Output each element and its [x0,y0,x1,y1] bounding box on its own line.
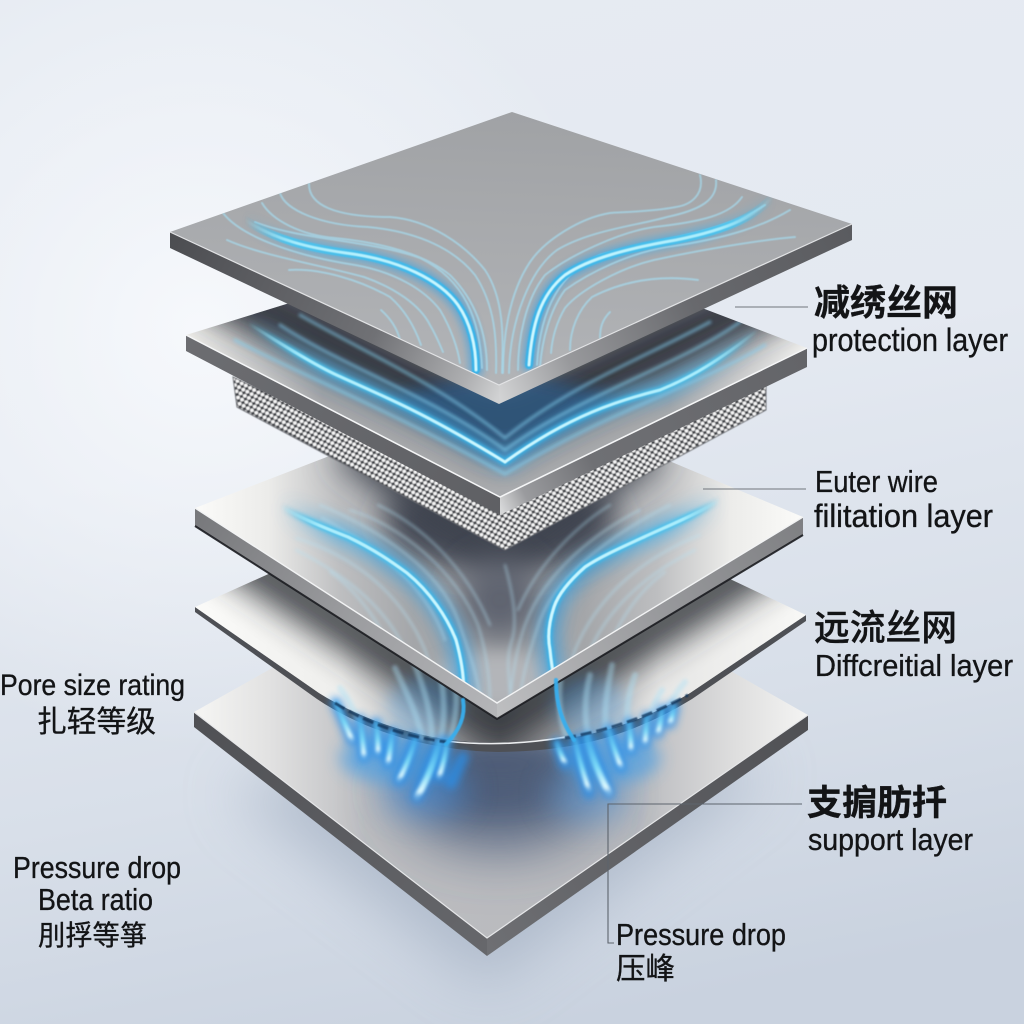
label: pressure drop and beta ratio: Pressure drop [13,850,181,885]
differential layer top face [195,470,806,743]
bright cores [245,197,773,370]
label: support layer: 支掮肪扦 [807,784,947,823]
plate 3: lower filtration [194,456,804,720]
plate 2: filtration layer [186,304,807,515]
label: pore size rating [0,669,185,739]
plate 4: differential layer [195,574,806,752]
thin stream lines, right [505,505,700,700]
streams continuing past plate 3 edge [446,680,574,744]
thin lines right [503,175,795,373]
cyan band [245,197,773,370]
label: filtration layer [814,464,993,534]
label: pore size rating: Pore size rating [0,669,185,702]
label: pressure drop and beta ratio [13,850,181,951]
label: pressure drop (bottom): 压峰 [616,953,675,986]
label: pressure drop and beta ratio: 刖捊等箏 [38,920,147,951]
stream glow [248,323,758,462]
wire mesh layer [233,377,766,550]
differential layer thickness [195,607,806,752]
leader lines [608,307,808,943]
bright cores [248,323,758,462]
stream glow [245,197,773,370]
soft streaks above the curved edge [340,665,685,742]
thin stream lines, left [296,505,490,700]
support layer top face [194,540,808,938]
label: pressure drop (bottom) [616,917,786,986]
blue flow streaks below the differential layer [335,665,688,797]
protection layer thickness [170,232,499,404]
filtration layer thickness [186,335,500,515]
thin lines [235,315,765,474]
label: filtration layer: Euter wire [815,464,938,499]
filtration layer top face [186,235,807,497]
protection layer top face [170,112,852,385]
thin lines left [223,183,503,373]
label: protection layer [812,282,1008,358]
right stream glow [549,500,720,703]
plate 3 top face [195,390,803,703]
bright stream core, right [546,506,708,670]
bright stream core, left [294,513,466,682]
cyan band [248,323,758,462]
label: pressure drop and beta ratio: Beta ratio [38,882,153,917]
plate 3 thickness [195,508,497,719]
left stream glow [281,507,464,703]
plate 1: protection layer [170,112,852,404]
plate 5: support layer [194,668,808,988]
label: differential layer [814,607,1013,683]
label: protection layer: 减绣丝网 [814,282,958,323]
label: support layer: support layer [808,822,973,857]
label: differential layer: 远流丝网 [814,607,957,648]
label: differential layer: Diffcreitial layer [815,648,1013,683]
dark contact marks on the curved edge [335,703,447,742]
soft shadow under support layer [230,720,770,985]
label: support layer [807,784,973,857]
right flame cores [557,707,674,793]
flame haze [340,677,660,784]
label: pore size rating: 扎轻等级 [37,706,156,739]
cyan stream band [281,500,720,703]
right flame glow [557,707,674,793]
support layer thickness [194,712,487,956]
left flame glow [336,703,463,797]
label: filtration layer: filitation layer [814,498,993,534]
left flame cores [336,703,447,797]
label: pressure drop (bottom): Pressure drop [616,917,786,952]
